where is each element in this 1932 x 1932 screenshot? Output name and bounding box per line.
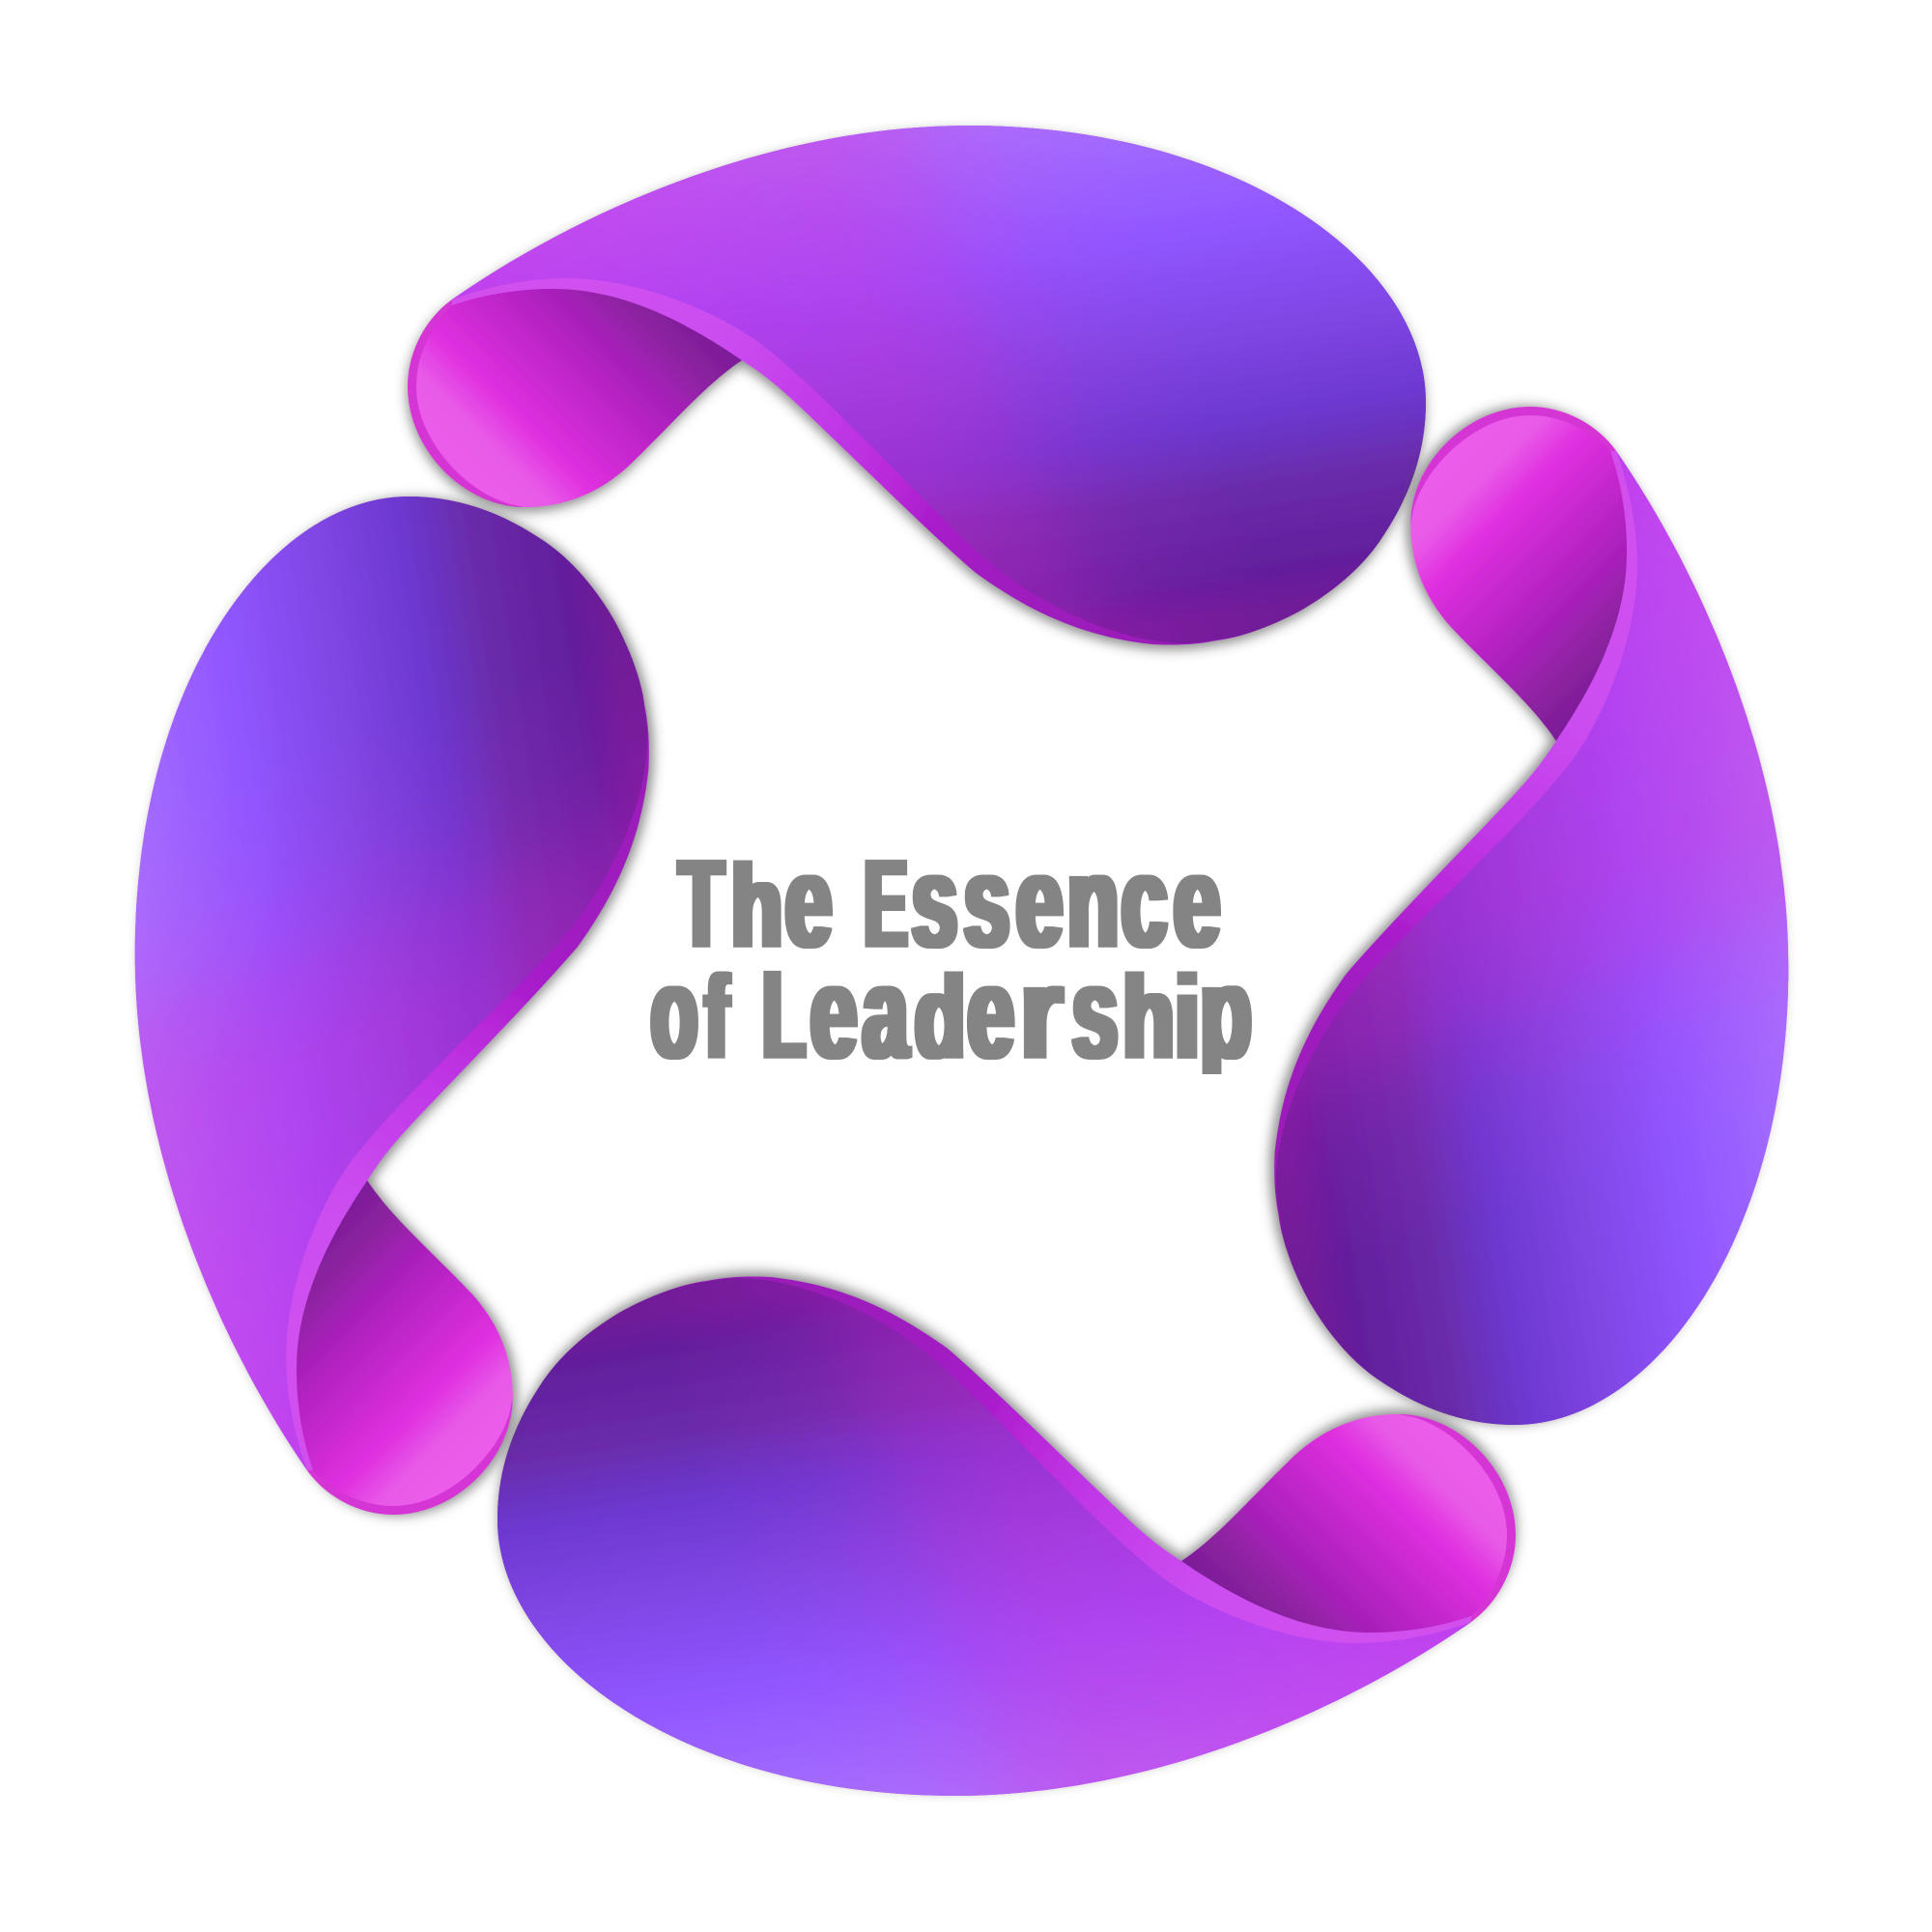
title line 1: e — [1174, 828, 1220, 975]
title line 2: s — [1072, 939, 1118, 1086]
title line 1: s — [964, 828, 1009, 975]
title line 1: h — [731, 840, 782, 972]
title line 2: f — [705, 952, 728, 1083]
title — [650, 860, 1252, 1074]
title line 2: e — [968, 939, 1014, 1086]
ribbon lip: left — [135, 497, 649, 1470]
title line 1: E — [865, 835, 907, 974]
petal: bottom — [497, 1276, 1516, 1796]
title line 1: e — [1016, 828, 1063, 975]
title line 2: d — [915, 952, 965, 1083]
petal: top — [408, 126, 1426, 645]
petal: left — [135, 497, 649, 1515]
fold: right — [1410, 407, 1645, 741]
title line 2: h — [1122, 952, 1175, 1083]
title line 1: T — [679, 835, 724, 974]
title line 1: c — [1122, 828, 1167, 975]
body: right — [1276, 451, 1788, 1425]
title line 2: i — [1175, 952, 1200, 1083]
title line 1: s — [912, 828, 957, 975]
title line 2: p — [1200, 939, 1252, 1086]
title line 2: L — [763, 946, 806, 1085]
body: top — [452, 126, 1426, 643]
title line 1: n — [1067, 828, 1119, 975]
title line 2: a — [863, 939, 909, 1086]
ribbon lip: bottom — [497, 1276, 1471, 1796]
ribbon lip: top — [452, 126, 1426, 645]
title line 2: r — [1020, 939, 1063, 1086]
fold: left — [278, 1180, 513, 1515]
title line 1: e — [785, 828, 832, 975]
fold: top — [408, 270, 742, 507]
fold: bottom — [1181, 1414, 1516, 1651]
petal: right — [1274, 407, 1788, 1425]
ribbon lip: right — [1274, 451, 1788, 1425]
title line 2: e — [810, 939, 857, 1086]
body: bottom — [497, 1278, 1471, 1796]
title line 2: o — [651, 939, 697, 1086]
body: left — [135, 497, 647, 1470]
